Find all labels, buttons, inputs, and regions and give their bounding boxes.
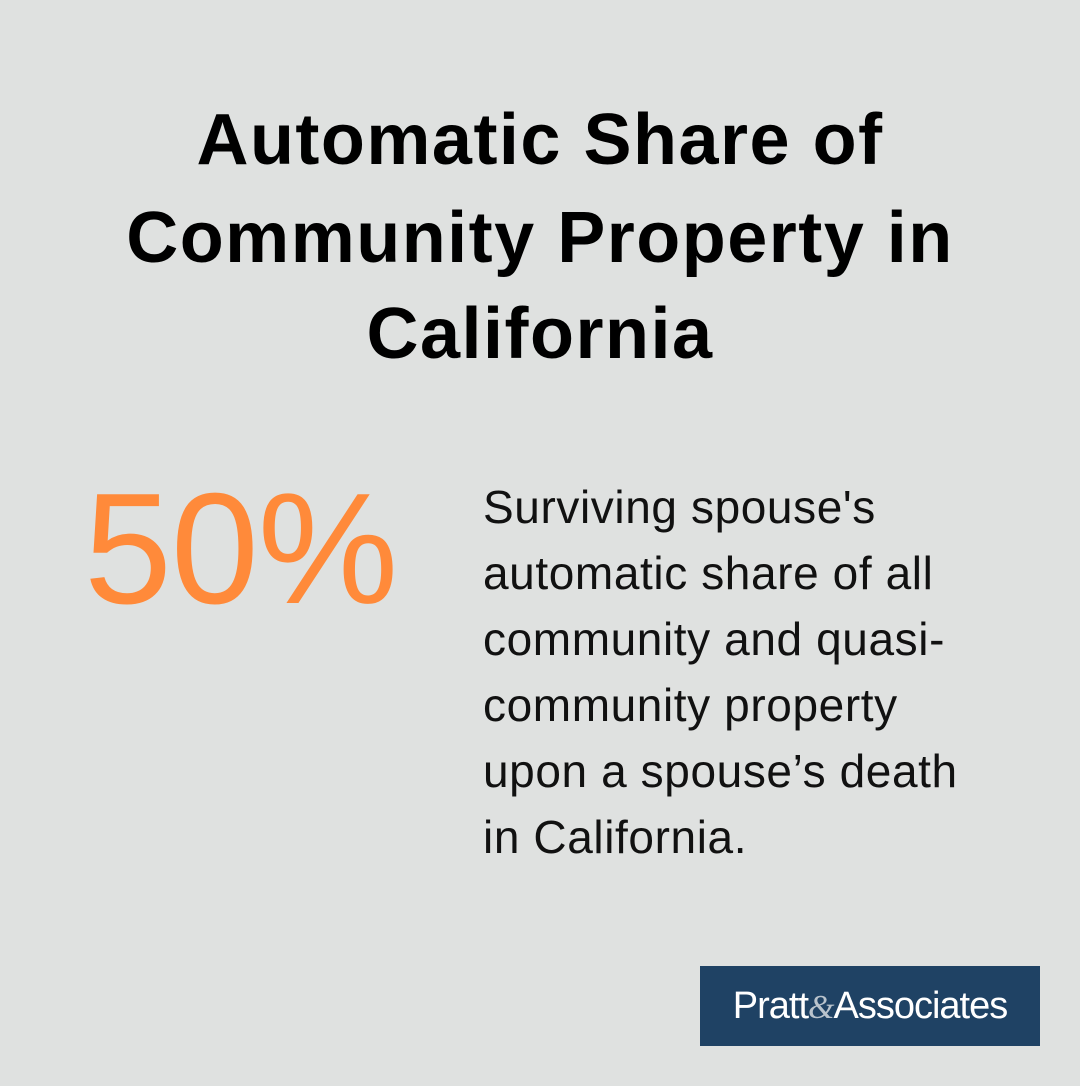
description text: community and quasi- bbox=[483, 613, 945, 665]
title: Community Property in bbox=[126, 198, 954, 278]
description text: upon a spouse’s death bbox=[483, 745, 958, 797]
title: California bbox=[366, 294, 714, 374]
title bbox=[126, 100, 954, 374]
title: Automatic Share of bbox=[196, 100, 884, 180]
logo: Pratt & Associates: Pratt&Associates bbox=[733, 985, 1007, 1027]
description text: automatic share of all bbox=[483, 547, 933, 599]
description text: Surviving spouse's bbox=[483, 481, 876, 533]
description text bbox=[483, 481, 958, 863]
description text: in California. bbox=[483, 811, 747, 863]
stat: 50%: 50% bbox=[84, 461, 397, 637]
description text: community property bbox=[483, 679, 898, 731]
logo: Pratt & Associates bbox=[700, 966, 1040, 1046]
